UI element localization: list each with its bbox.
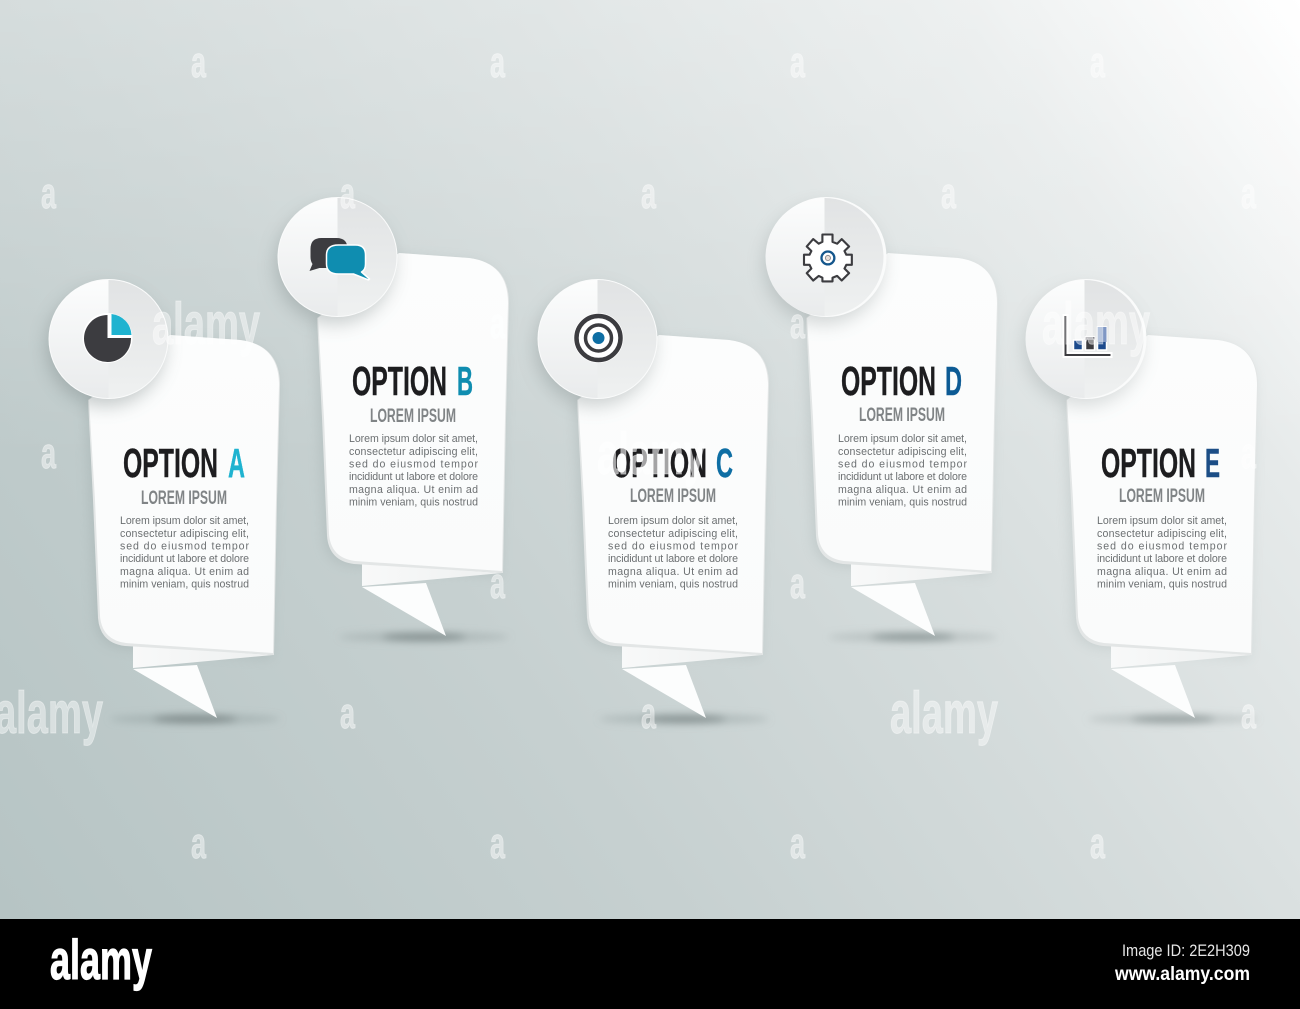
- heading: OPTION: [352, 358, 447, 404]
- body text: incididunt ut labore et dolore: [349, 471, 478, 483]
- body text: consectetur adipiscing elit,: [838, 446, 967, 458]
- body text: magna aliqua. Ut enim ad: [608, 566, 738, 578]
- watermarks: a: [490, 819, 505, 868]
- icon: speech bubbles circle: [276, 197, 398, 324]
- watermarks: a: [941, 169, 956, 218]
- heading: D: [945, 358, 962, 404]
- watermarks: a: [1090, 819, 1105, 868]
- heading: A: [228, 440, 245, 486]
- body text: minim veniam, quis nostrud: [838, 496, 967, 508]
- subheading: LOREM IPSUM: [1119, 486, 1205, 507]
- panel: option D: [803, 253, 998, 642]
- watermarks: a: [41, 169, 56, 218]
- icon: pie chart circle: [46, 279, 168, 406]
- watermarks: a: [191, 38, 206, 87]
- watermarks: a: [790, 299, 805, 348]
- watermarks: a: [1241, 689, 1256, 738]
- heading: C: [716, 440, 733, 486]
- watermarks: a: [641, 689, 656, 738]
- body text: [349, 433, 478, 508]
- body text: Lorem ipsum dolor sit amet,: [120, 515, 249, 527]
- body text: minim veniam, quis nostrud: [349, 496, 478, 508]
- subheading: LOREM IPSUM: [141, 488, 227, 509]
- icon: bar chart circle: [1024, 279, 1146, 406]
- body text: consectetur adipiscing elit,: [349, 446, 478, 458]
- watermarks: a: [1241, 429, 1256, 478]
- body text: incididunt ut labore et dolore: [838, 471, 967, 483]
- watermarks: a: [1090, 38, 1105, 87]
- subheading: LOREM IPSUM: [630, 486, 716, 507]
- footer logo: alamy: [50, 928, 152, 991]
- website: www.alamy.com: [1114, 964, 1250, 985]
- body text: consectetur adipiscing elit,: [1097, 528, 1227, 540]
- watermarks: a: [490, 38, 505, 87]
- heading: B: [457, 358, 473, 404]
- body text: incididunt ut labore et dolore: [120, 553, 249, 565]
- body text: Lorem ipsum dolor sit amet,: [349, 433, 478, 445]
- body text: minim veniam, quis nostrud: [608, 578, 738, 590]
- body text: sed do eiusmod tempor: [608, 540, 738, 552]
- watermarks: alamy: [152, 291, 260, 357]
- body text: Lorem ipsum dolor sit amet,: [1097, 515, 1227, 527]
- body text: Lorem ipsum dolor sit amet,: [608, 515, 738, 527]
- watermarks: a: [490, 299, 505, 348]
- body text: sed do eiusmod tempor: [120, 540, 249, 552]
- icon: gear circle: [764, 197, 886, 324]
- body text: [1097, 515, 1227, 590]
- watermarks: a: [340, 689, 355, 738]
- watermarks: a: [790, 819, 805, 868]
- watermarks: a: [41, 429, 56, 478]
- footer bar: [0, 919, 1300, 1009]
- heading: OPTION: [123, 440, 218, 486]
- watermarks: [0, 38, 1256, 868]
- body text: Lorem ipsum dolor sit amet,: [838, 433, 967, 445]
- body text: minim veniam, quis nostrud: [120, 578, 249, 590]
- body text: magna aliqua. Ut enim ad: [349, 484, 478, 496]
- panel: option A: [85, 335, 280, 724]
- subheading: LOREM IPSUM: [859, 405, 945, 426]
- body text: sed do eiusmod tempor: [1097, 540, 1227, 552]
- body text: minim veniam, quis nostrud: [1097, 578, 1227, 590]
- panel: option C: [574, 335, 769, 724]
- heading: E: [1205, 440, 1220, 486]
- watermarks: alamy: [0, 680, 103, 746]
- body text: [838, 433, 967, 508]
- watermarks: alamy: [597, 421, 705, 487]
- body text: incididunt ut labore et dolore: [1097, 553, 1227, 565]
- body text: magna aliqua. Ut enim ad: [120, 566, 249, 578]
- heading: OPTION: [1101, 440, 1196, 486]
- watermarks: a: [1241, 169, 1256, 218]
- watermarks: a: [790, 559, 805, 608]
- icon: target circle: [536, 279, 658, 406]
- panel: option B: [314, 253, 509, 642]
- body text: incididunt ut labore et dolore: [608, 553, 738, 565]
- panel: option E: [1063, 335, 1258, 724]
- watermarks: alamy: [890, 680, 998, 746]
- body text: [608, 515, 738, 590]
- body text: [120, 515, 249, 590]
- watermarks: a: [790, 38, 805, 87]
- watermarks: a: [340, 169, 355, 218]
- subheading: LOREM IPSUM: [370, 406, 456, 427]
- watermarks: a: [641, 169, 656, 218]
- body text: sed do eiusmod tempor: [838, 458, 967, 470]
- watermarks: a: [191, 819, 206, 868]
- image id: Image ID: 2E2H309: [1122, 941, 1250, 960]
- watermarks: alamy: [1042, 291, 1150, 357]
- body text: sed do eiusmod tempor: [349, 458, 478, 470]
- heading: OPTION: [841, 358, 936, 404]
- body text: consectetur adipiscing elit,: [120, 528, 249, 540]
- body text: magna aliqua. Ut enim ad: [1097, 566, 1227, 578]
- body text: magna aliqua. Ut enim ad: [838, 484, 967, 496]
- body text: consectetur adipiscing elit,: [608, 528, 738, 540]
- watermarks: a: [490, 559, 505, 608]
- heading: OPTION: [612, 440, 707, 486]
